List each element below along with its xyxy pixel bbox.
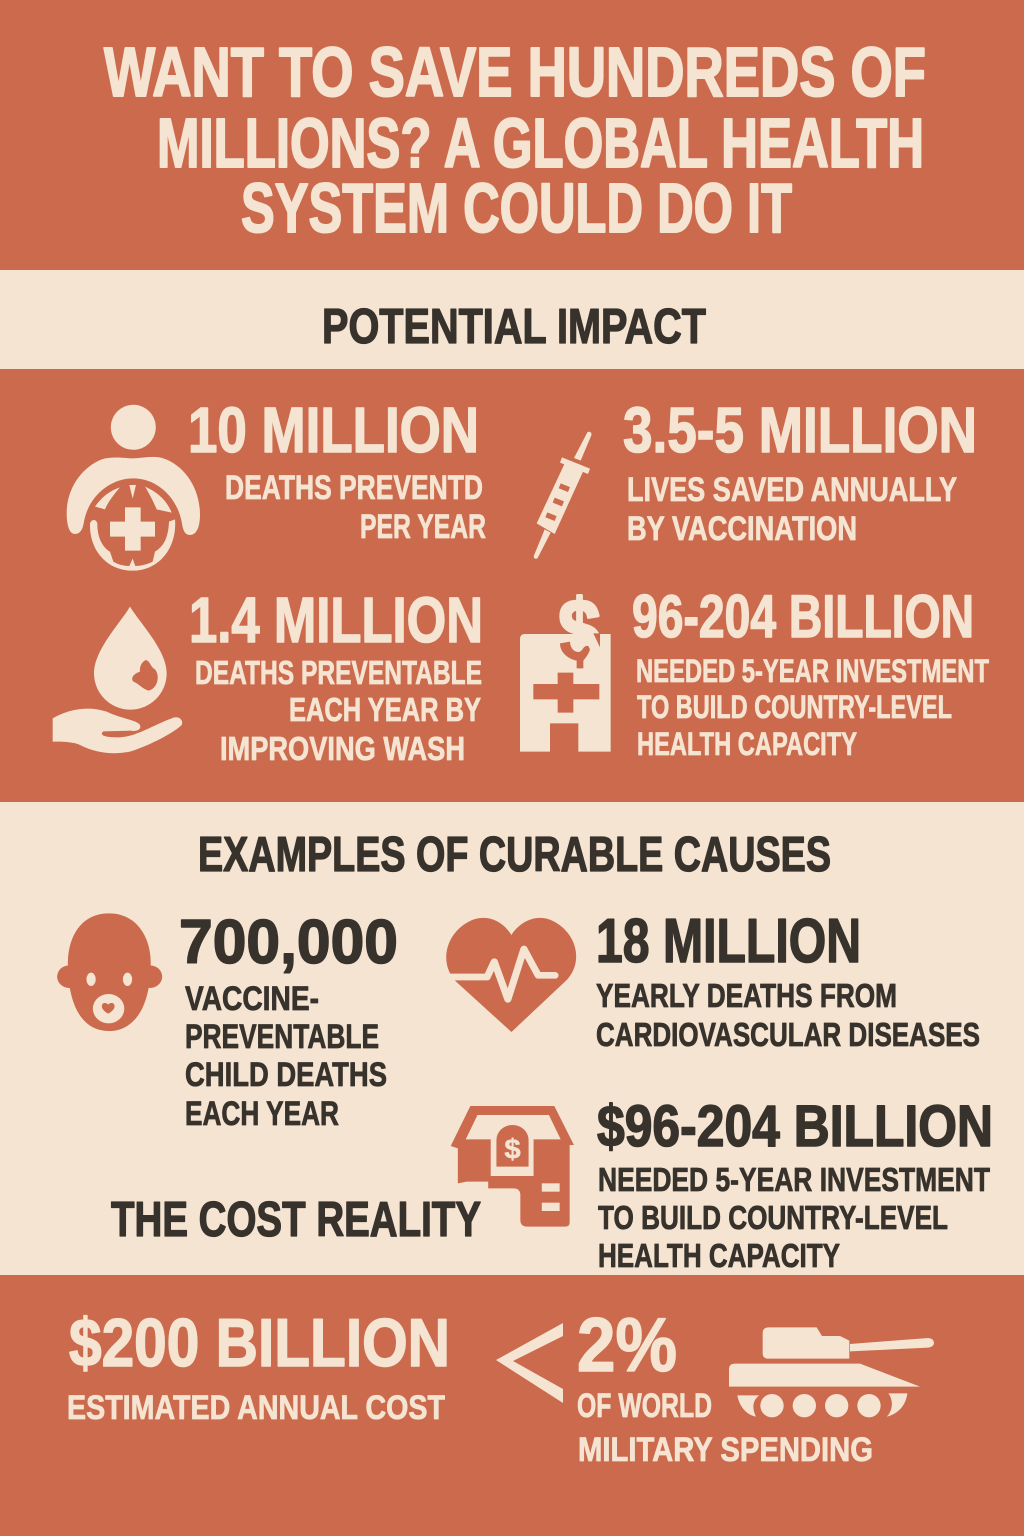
stat: 1.4 million: IMPROVING WASH [220,730,465,767]
heading: the cost reality: THE COST REALITY [111,1193,481,1247]
stat: 700,000 [179,908,398,1133]
stat: $200 billion [67,1305,450,1427]
panel: cost comparison [0,1275,1024,1536]
icon: person holding globe with medical cross [67,405,200,571]
stat: 10 million: DEATHS PREVENTD [225,469,483,507]
panel: potential impact heading band [0,270,1024,369]
icon: bank building with dollar door: $ [504,1134,521,1165]
stat: 18 million [596,907,980,1053]
stat: 700,000: 700,000 [179,908,398,977]
icon: less-than sign [496,1323,563,1403]
title [104,33,926,247]
stat: 1.4 million: 1.4 MILLION [189,584,483,656]
panel: potential impact stats [0,369,1024,802]
icon: heart with pulse line [446,918,576,1032]
icon: tank [729,1327,934,1417]
panel: curable causes and cost reality [0,802,1024,1275]
icon: syringe [534,432,592,559]
stat: 700,000: CHILD DEATHS [185,1056,387,1094]
stat: 96-204 billion [632,583,989,762]
icon: hospital with dollar sign: $ [558,582,601,678]
heading: examples of curable causes: EXAMPLES OF CURABLE CAUSES [198,828,831,882]
stat: 2% of world military spending [577,1303,873,1469]
stat: 10 million: 10 MILLION [188,394,479,466]
stat: 1.4 million: DEATHS PREVENTABLE [195,654,482,691]
panel: title banner [0,0,1024,270]
stat: $200 billion: ESTIMATED ANNUAL COST [67,1389,445,1427]
icon: water drop on hand [53,607,182,753]
stat: 1.4 million [189,584,483,767]
title: SYSTEM COULD DO IT [241,169,792,247]
icon: hospital with dollar sign [520,582,611,752]
stat: 18 million: 18 MILLION [596,907,861,976]
stat: $96-204 billion: HEALTH CAPACITY [598,1237,840,1274]
icon: bank building with dollar door [451,1106,574,1227]
stat: $96-204 billion [597,1094,993,1274]
stat: 10 million: PER YEAR [360,508,486,546]
stat: 2% of world military spending: 2% [577,1303,677,1388]
stat: 700,000: PREVENTABLE [185,1018,379,1056]
stat: 2% of world military spending: MILITARY SPENDING [578,1431,873,1469]
stat: 700,000: EACH YEAR [185,1095,339,1133]
stat: 3.5-5 million: BY VACCINATION [627,510,857,548]
stat: 700,000: VACCINE- [185,980,319,1018]
stat: $200 billion: $200 BILLION [69,1305,450,1381]
stat: 1.4 million: EACH YEAR BY [289,691,481,728]
icon: baby face with pacifier [57,913,162,1031]
heading: potential impact: POTENTIAL IMPACT [322,300,706,354]
stat: 3.5-5 million [623,394,977,548]
stat: 2% of world military spending: OF WORLD [577,1387,712,1425]
stat: 18 million: YEARLY DEATHS FROM [596,977,897,1014]
stat: 96-204 billion: HEALTH CAPACITY [637,726,857,762]
stat: 10 million [188,394,486,546]
